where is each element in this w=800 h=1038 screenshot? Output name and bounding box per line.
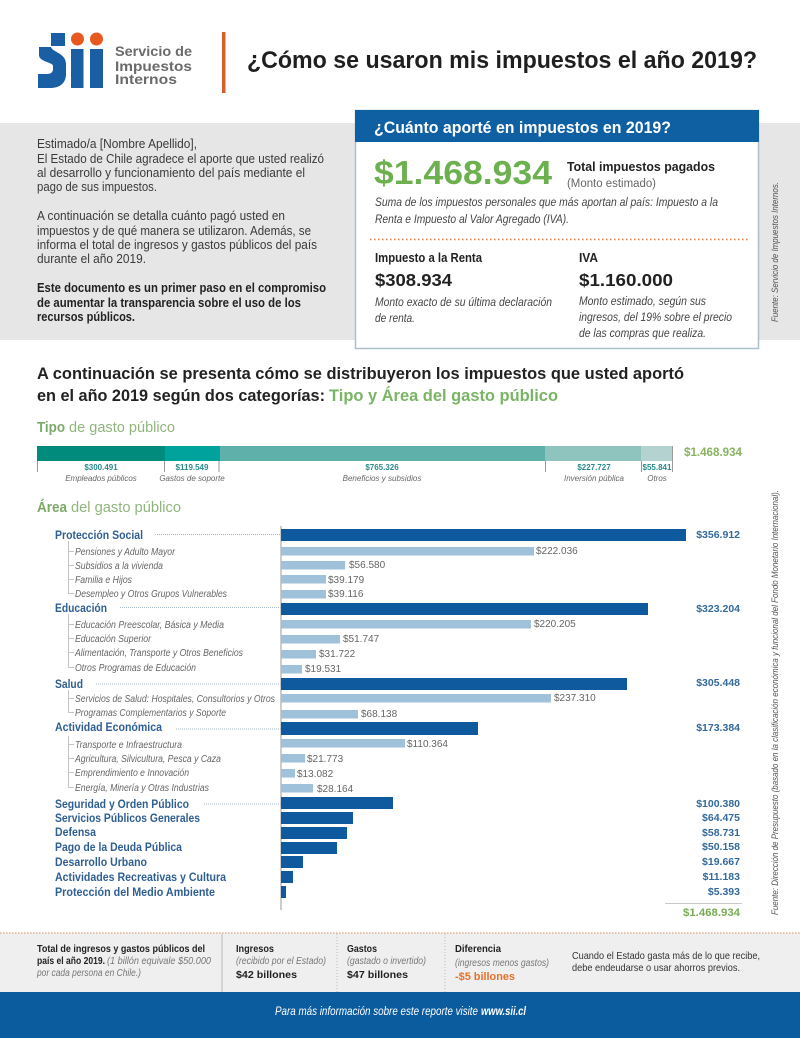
description	[375, 197, 718, 226]
group: Actividad Económica: Agricultura, Silvicultura, Pesca y Caza	[74, 754, 221, 765]
income tax block: Monto exacto de su última declaración	[375, 297, 552, 309]
group: Actividad Económica: $28.164	[317, 784, 354, 795]
group: Protección Social	[55, 529, 740, 600]
segment: Inversión pública	[564, 463, 625, 483]
ingresos: (recibido por el Estado)	[236, 956, 326, 967]
row: Defensa	[55, 827, 740, 839]
description: Suma de los impuestos personales que más aportan al país: Impuesto a la	[375, 197, 718, 209]
panel: national totals	[0, 933, 800, 992]
bar chart: área del gasto	[55, 526, 740, 910]
gastos	[347, 943, 426, 981]
group: Protección Social: $356.912	[696, 529, 740, 541]
section heading: en el año 2019 según dos categorías:	[37, 386, 325, 405]
group: Salud	[55, 677, 740, 720]
text block: intro letter: recursos públicos.	[37, 310, 135, 324]
group: Salud: Salud	[55, 679, 83, 691]
totals intro: Total de ingresos y gastos públicos del	[37, 943, 205, 955]
group: Actividad Económica: Emprendimiento e Innovación	[75, 768, 189, 779]
group: Educación: $51.747	[343, 634, 380, 645]
stacked bar total: $1.468.934	[684, 447, 743, 459]
group: Protección Social: Subsidios a la vivienda	[75, 561, 163, 572]
segment: Otros: $55.841	[643, 463, 672, 472]
VAT block: $1.160.000	[579, 270, 673, 290]
chart total	[665, 904, 742, 919]
header logo: SII: Internos	[115, 72, 177, 87]
VAT block: de las compras que realiza.	[579, 328, 706, 340]
heading: Tipo de gasto público: de gasto público	[69, 419, 175, 436]
group: Actividad Económica: $173.384	[696, 722, 740, 734]
group: Educación	[55, 603, 740, 675]
heading: Área del gasto público: Área	[37, 499, 68, 516]
segment: Empleados públicos	[65, 463, 137, 483]
footer band: www.sii.cl	[481, 1004, 527, 1018]
text block: intro letter	[37, 137, 326, 324]
row: Defensa: Defensa	[55, 827, 97, 839]
ingresos: Ingresos	[236, 943, 274, 955]
row: Protección del Medio Ambiente: Protección del Medio Ambiente	[55, 887, 215, 899]
group: Protección Social: $39.116	[328, 589, 364, 600]
diferencia	[455, 943, 549, 983]
segment: Gastos de soporte: $119.549	[176, 463, 209, 472]
group: Educación: Educación Preescolar, Básica y Media	[75, 620, 224, 631]
group: Actividad Económica: $13.082	[297, 769, 334, 780]
text block: intro letter: durante el año 2019.	[37, 252, 146, 266]
group: Educación: $31.722	[319, 649, 356, 660]
chart total: $1.468.934	[683, 907, 741, 919]
header divider	[222, 32, 226, 93]
row: Protección del Medio Ambiente: $5.393	[708, 886, 740, 898]
row: Defensa: $58.731	[702, 827, 740, 839]
segment: Empleados públicos: Empleados públicos	[65, 474, 137, 483]
row: Actividades Recreativas y Cultura: Actividades Recreativas y Cultura	[55, 872, 227, 884]
heading: Tipo de gasto público: Tipo	[37, 419, 65, 436]
section heading: A continuación se presenta cómo se distribuyeron los impuestos que usted aportó	[37, 364, 684, 383]
group: Educación: $323.204	[696, 603, 740, 615]
group: Actividad Económica: $21.773	[307, 754, 344, 765]
group: Actividad Económica: $110.364	[407, 739, 448, 750]
VAT block: Monto estimado, según sus	[579, 296, 706, 308]
income tax block: de renta.	[375, 313, 415, 325]
totals intro	[36, 943, 211, 979]
footer band: Para más información sobre este reporte visite	[275, 1004, 478, 1018]
text block: intro letter: pago de sus impuestos.	[37, 180, 157, 194]
text block: intro letter: El Estado de Chile agradece el aporte que usted realizó	[37, 152, 324, 166]
source note: top: Fuente: Servicio de Impuestos Internos.	[770, 182, 781, 322]
group: Protección Social: Familia e Hijos	[75, 575, 132, 586]
text block: intro letter: Este documento es un primer paso en el compromiso	[37, 281, 326, 295]
panel: gray intro band	[0, 123, 800, 340]
segment: Inversión pública: Inversión pública	[564, 474, 625, 483]
row: Seguridad y Orden Público	[55, 797, 740, 811]
group: Protección Social: $56.580	[349, 560, 386, 571]
footer band	[0, 992, 800, 1038]
VAT block: ingresos, del 19% sobre el precio	[579, 312, 733, 324]
text block: intro letter: impuestos y de qué manera se utilizaron. Además, se	[37, 224, 311, 238]
text block: intro letter: Estimado/a [Nombre Apellido],	[37, 137, 197, 151]
group: Educación: Otros Programas de Educación	[75, 663, 196, 674]
total label: Total impuestos pagados	[567, 160, 715, 174]
row: Servicios Públicos Generales	[55, 812, 740, 825]
totals intro: (1 billón equivale $50.000	[107, 956, 211, 967]
income tax block: Impuesto a la Renta	[375, 251, 483, 265]
header logo: SII: Servicio de	[115, 44, 193, 59]
row: Actividades Recreativas y Cultura: $11.183	[703, 871, 740, 883]
gastos: Gastos	[347, 943, 377, 955]
row: Desarrollo Urbano	[55, 856, 740, 869]
group: Protección Social: Protección Social	[55, 530, 143, 542]
row: Desarrollo Urbano: Desarrollo Urbano	[55, 857, 147, 869]
group: Salud: $68.138	[361, 709, 398, 720]
VAT block	[579, 251, 733, 340]
total label: (Monto estimado)	[567, 178, 656, 190]
segment: Otros	[643, 463, 672, 483]
row: Desarrollo Urbano: $19.667	[702, 856, 740, 868]
group: Educación: Educación Superior	[75, 634, 152, 645]
row: Servicios Públicos Generales: Servicios Públicos Generales	[55, 813, 200, 825]
row: Pago de la Deuda Pública: $50.158	[702, 841, 740, 853]
segment: Inversión pública: $227.727	[577, 463, 611, 472]
group: Salud: $305.448	[696, 677, 740, 689]
group: Educación: Alimentación, Transporte y Otros Beneficios	[74, 648, 243, 659]
segment: Gastos de soporte: Gastos de soporte	[159, 474, 225, 483]
group: Protección Social: Desempleo y Otros Grupos Vulnerables	[75, 589, 227, 600]
VAT block: IVA	[579, 251, 598, 265]
totals intro: país el año 2019.	[37, 955, 105, 967]
header logo: SII: Impuestos	[115, 59, 192, 74]
note on deficit: debe endeudarse o usar ahorros previos.	[572, 962, 740, 974]
section heading	[37, 364, 684, 405]
segment: Beneficios y subsidios: Beneficios y subsidios	[343, 474, 421, 483]
row: Servicios Públicos Generales: $64.475	[702, 812, 740, 824]
row: Seguridad y Orden Público: $100.380	[696, 798, 740, 810]
group: Protección Social: $39.179	[328, 575, 365, 586]
title: ¿Cómo se usaron mis impuestos el año 2019?	[247, 47, 757, 74]
stacked bar chart: tipo de gasto	[37, 446, 673, 483]
group: Actividad Económica: Actividad Económica	[55, 722, 163, 734]
text block: intro letter: al desarrollo y funcionamiento del país mediante el	[37, 166, 305, 180]
segment: Beneficios y subsidios	[343, 463, 421, 483]
description: Renta e Impuesto al Valor Agregado (IVA).	[375, 214, 569, 226]
card header	[355, 110, 759, 142]
section heading: Tipo y Área del gasto público	[329, 386, 558, 405]
group: Actividad Económica: Transporte e Infraestructura	[75, 740, 182, 751]
header logo: SII	[38, 32, 193, 88]
group: Protección Social: $222.036	[536, 546, 578, 557]
panel: personal contribution card	[355, 110, 759, 348]
diferencia: -$5 billones	[455, 971, 515, 983]
totals intro: por cada persona en Chile.)	[36, 968, 141, 979]
group: Salud: Servicios de Salud: Hospitales, Consultorios y Otros	[75, 694, 275, 705]
gastos: $47 billones	[347, 969, 408, 981]
total label	[567, 160, 715, 190]
group: Actividad Económica	[55, 722, 740, 795]
ingresos	[236, 943, 326, 981]
group: Educación: Educación	[55, 603, 107, 615]
income tax block: $308.934	[375, 270, 452, 290]
total amount: $1.468.934	[374, 154, 553, 191]
source note: bottom: Fuente: Dirección de Presupuesto (basado en la clasificación económica y funcional del Fondo Monetario Internacional).	[770, 490, 781, 915]
text block: intro letter: de aumentar la transparencia sobre el uso de los	[37, 296, 301, 310]
group: Actividad Económica: Energía, Minería y Otras Industrias	[75, 783, 209, 794]
row: Pago de la Deuda Pública: Pago de la Deuda Pública	[55, 842, 183, 854]
group: Salud: $237.310	[554, 693, 596, 704]
diferencia: Diferencia	[455, 943, 501, 955]
text block: intro letter: informa el total de ingresos y gastos públicos del país	[37, 238, 317, 252]
income tax block	[375, 251, 552, 325]
group: Educación: $19.531	[305, 664, 342, 675]
row: Protección del Medio Ambiente	[55, 886, 740, 899]
row: Actividades Recreativas y Cultura	[55, 871, 740, 884]
row: Seguridad y Orden Público: Seguridad y Orden Público	[55, 799, 189, 811]
segment: Gastos de soporte	[159, 463, 225, 483]
gastos: (gastado o invertido)	[347, 956, 426, 967]
card header: ¿Cuánto aporté en impuestos en 2019?	[374, 118, 671, 137]
segment: Otros: Otros	[647, 474, 667, 483]
text block: intro letter: A continuación se detalla cuánto pagó usted en	[37, 209, 285, 223]
ingresos: $42 billones	[236, 969, 297, 981]
group: Salud: Programas Complementarios y Soporte	[75, 708, 226, 719]
group: Protección Social: Pensiones y Adulto Mayor	[75, 547, 176, 558]
diferencia: (ingresos menos gastos)	[455, 958, 549, 969]
row: Pago de la Deuda Pública	[55, 841, 740, 854]
note on deficit	[572, 950, 760, 974]
segment: Empleados públicos: $300.491	[84, 463, 118, 472]
segment: Beneficios y subsidios: $765.326	[365, 463, 399, 472]
note on deficit: Cuando el Estado gasta más de lo que recibe,	[572, 950, 760, 962]
heading: Área del gasto público: del gasto público	[71, 499, 181, 516]
group: Educación: $220.205	[534, 619, 576, 630]
